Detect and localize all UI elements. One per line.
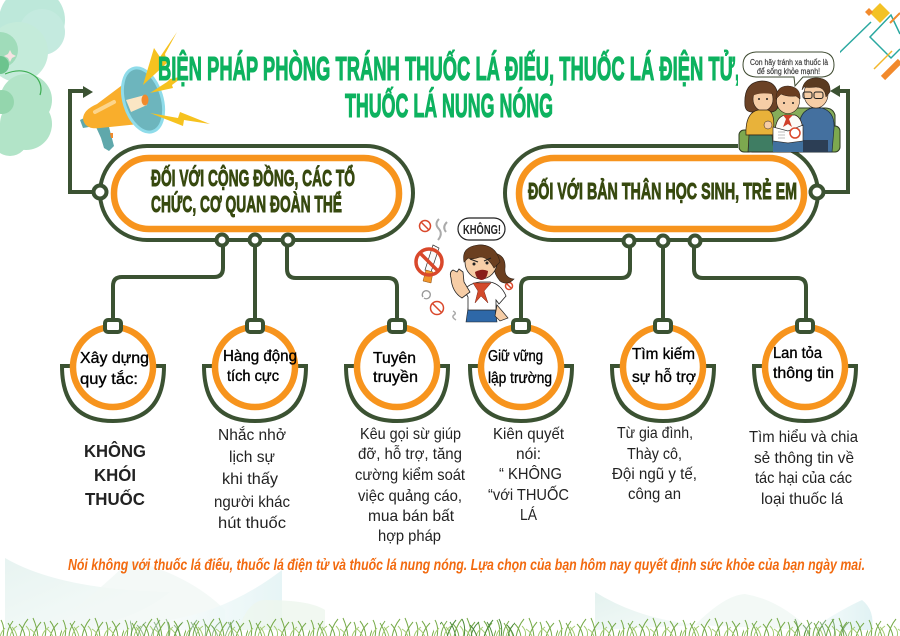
text block: Tìm hiểu: sẻ thông tin về — [754, 450, 854, 467]
text block: Từ gia đình — [612, 425, 697, 503]
text block: Kêu gọi: mua bán bất — [368, 508, 455, 525]
title — [158, 49, 740, 124]
node: Hàng động tích cực: tích cực — [227, 368, 279, 385]
icon: small prohibition signs — [420, 220, 512, 314]
text block: Tìm hiểu: tác hại của các — [755, 470, 852, 487]
connectors: left branches — [113, 246, 397, 322]
node: Lan tỏa thông tin — [754, 320, 856, 421]
text block: Nhắc nhở: Nhắc nhở — [218, 425, 286, 444]
icon: no cigarette sign — [416, 245, 442, 283]
text block: Từ gia đình: Thày cô, — [627, 446, 682, 463]
illustration: family reading together — [738, 50, 840, 152]
node: Giữ vững lập trường: lập trường — [488, 370, 552, 387]
text block: Tìm hiểu — [749, 428, 858, 508]
panel: right heading pill — [505, 146, 824, 246]
node: Xây dựng quy tắc: Xây dựng — [80, 350, 149, 367]
text block: KHÔNG KHÓI THUỐC — [84, 440, 146, 509]
icon: smoke — [436, 219, 447, 240]
node: Lan tỏa thông tin: thông tin — [773, 365, 834, 382]
text block: Kiên quyết: “ KHÔNG — [499, 464, 562, 483]
node: Xây dựng quy tắc — [62, 320, 164, 421]
node: Tuyên truyền: truyền — [373, 369, 418, 386]
node: Giữ vững lập trường — [470, 320, 572, 421]
node: Hàng động tích cực: Hàng động — [223, 348, 297, 365]
text block: Kêu gọi: việc quảng cáo, — [358, 488, 462, 505]
icon: megaphone — [80, 32, 210, 151]
text block: KHÔNG KHÓI THUỐC: THUỐC — [85, 488, 145, 509]
text block: Kiên quyết: nói: — [516, 446, 541, 463]
speech bubble: để sống khỏe mạnh! — [757, 67, 820, 76]
text block: Tìm hiểu: loại thuốc lá — [761, 491, 843, 508]
title: THUỐC LÁ NUNG NÓNG — [345, 86, 553, 124]
panel: left heading pill: ĐỐI VỚI CỘNG ĐỒNG, CÁC TỔ — [151, 164, 355, 191]
panel: left heading pill — [94, 146, 413, 246]
text block: Từ gia đình: Đội ngũ y tế, — [612, 466, 697, 483]
text block: Nhắc nhở — [214, 425, 290, 532]
text block: Kiên quyết — [488, 426, 569, 524]
illustration: student saying no to cigarettes — [416, 218, 514, 322]
text block: Nhắc nhở: hút thuốc — [218, 515, 286, 532]
text block: KHÔNG KHÓI THUỐC: KHÔNG — [84, 440, 146, 461]
node: Tìm kiếm sự hỗ trợ: sự hỗ trợ — [632, 369, 696, 386]
icon: lightning bolts — [143, 32, 210, 126]
text block: Kiên quyết: LÁ — [520, 505, 537, 524]
decoration: geometric shapes top right — [835, 3, 900, 78]
text block: Nhắc nhở: khi thấy — [222, 471, 278, 488]
connector: left pill to megaphone arrow — [70, 86, 94, 192]
node: Tìm kiếm sự hỗ trợ: Tìm kiếm — [632, 346, 695, 363]
mother — [745, 81, 778, 152]
father — [798, 78, 834, 152]
panel: left heading pill: CHỨC, CƠ QUAN ĐOÀN THỂ — [151, 190, 342, 217]
boy with book — [773, 86, 803, 152]
speech bubble: Con hãy tránh xa thuốc là — [750, 58, 828, 67]
text block: Kiên quyết: Kiên quyết — [493, 426, 565, 443]
text block: Từ gia đình: công an — [628, 486, 681, 503]
girl — [450, 245, 514, 322]
node: Tuyên truyền: Tuyên — [373, 350, 416, 367]
text block: Kêu gọi: đỡ, hỗ trợ, tăng — [358, 444, 462, 463]
decoration: wave meshes bottom — [5, 558, 873, 630]
connector: right pill to family arrow — [823, 85, 848, 192]
speech bubble: KHÔNG!: KHÔNG! — [463, 222, 501, 237]
node: Xây dựng quy tắc: quy tắc: — [80, 371, 138, 388]
node: Hàng động tích cực — [204, 320, 306, 421]
text block: Tìm hiểu: Tìm hiểu và chia — [749, 428, 858, 446]
text block: Nhắc nhở: lịch sự — [229, 449, 275, 466]
node: Giữ vững lập trường: Giữ vững — [488, 348, 543, 365]
text block: Nhắc nhở: người khác — [214, 494, 290, 511]
text block: Kiên quyết: “với THUỐC — [488, 484, 569, 504]
text block: Kêu gọi: hợp pháp — [378, 528, 441, 545]
text block: Kêu gọi: cường kiểm soát — [355, 466, 466, 484]
node: Lan tỏa thông tin: Lan tỏa — [773, 345, 822, 362]
node: Tuyên truyền — [346, 320, 448, 421]
connectors: right branches — [521, 247, 806, 322]
decoration: grass strip — [0, 617, 900, 636]
node: Tìm kiếm sự hỗ trợ — [612, 320, 714, 421]
text block: Kêu gọi: Kêu gọi sừ giúp — [360, 426, 461, 443]
text block: KHÔNG KHÓI THUỐC: KHÓI — [94, 464, 136, 485]
text block: Kêu gọi — [355, 426, 466, 545]
decoration: green clouds top left — [0, 0, 65, 156]
icon: sofa — [739, 108, 840, 152]
text block: Từ gia đình: Từ gia đình, — [617, 425, 693, 442]
speech bubble — [743, 52, 834, 86]
